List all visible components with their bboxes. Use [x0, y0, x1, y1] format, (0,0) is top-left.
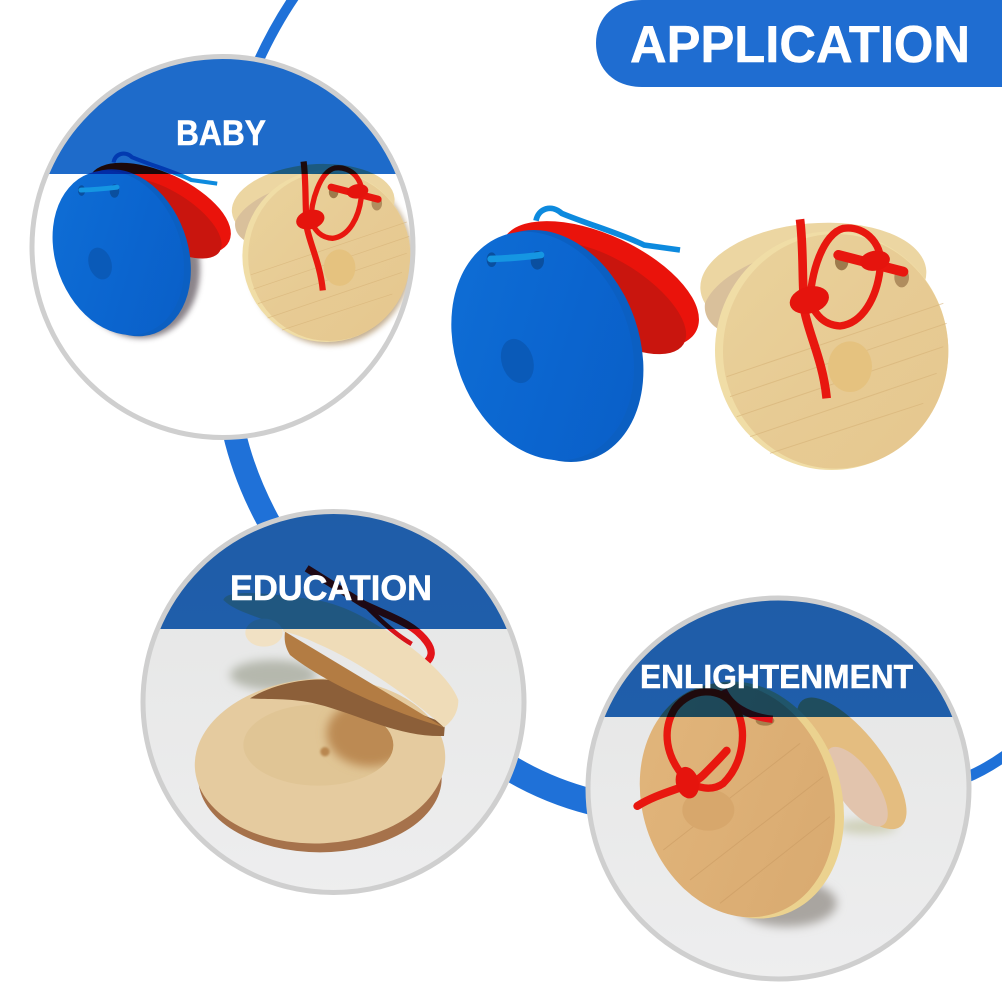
label: education: EDUCATION	[230, 569, 432, 608]
header pill: application: APPLICATION	[630, 16, 970, 74]
label: baby: BABY	[176, 114, 266, 153]
panel: baby circle	[20, 50, 430, 450]
main product photo: blue-red and natural wood castanets	[420, 195, 948, 488]
panel: education circle	[140, 509, 526, 895]
blue swoosh arc	[234, 0, 1002, 802]
panel: enlightenment circle	[580, 590, 980, 990]
label: enlightenment: ENLIGHTENMENT	[640, 658, 913, 695]
header pill: application	[596, 0, 1002, 87]
